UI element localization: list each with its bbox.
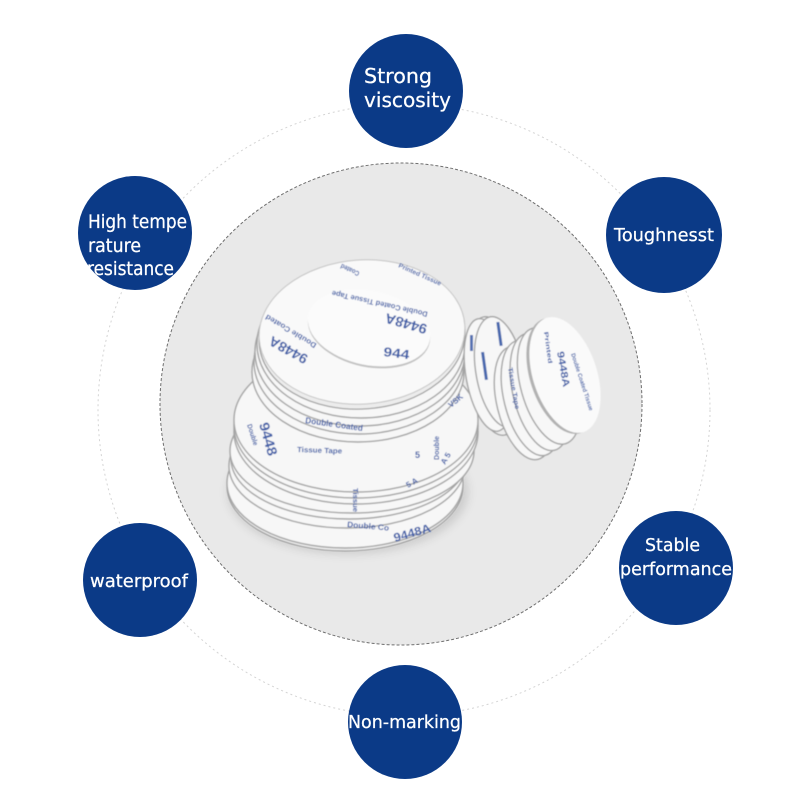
badge: Stable performance: performance: [620, 559, 732, 580]
large disc stack: Double: [245, 423, 259, 447]
badge: waterproof: [83, 523, 197, 637]
large disc stack: 944: [383, 344, 411, 362]
badge: Non-marking: [348, 665, 462, 779]
large disc stack: Coated: [340, 262, 361, 277]
central grey circle panel: [160, 163, 642, 645]
large disc stack: Double Coated: [263, 312, 318, 350]
large disc stack: Double Co: [347, 520, 390, 533]
small disc stacks: Printed: [542, 331, 552, 364]
badge: waterproof: waterproof: [90, 571, 189, 592]
large disc stack: Double: [434, 436, 441, 460]
printed labels on discs: 9448A: [383, 310, 429, 337]
large disc stack: Double Coated: [305, 415, 364, 433]
badge: Strong viscosity: viscosity: [364, 88, 451, 112]
badge: High temperature resistance: resistance: [87, 258, 174, 280]
badge: Stable performance: [619, 511, 733, 625]
outer dotted orbit ring: [98, 104, 710, 716]
badge: Toughnesst: [606, 177, 722, 293]
large disc stack: Tissue Tape: [297, 445, 342, 456]
product photo: stacks of adhesive discs: [227, 253, 614, 554]
small disc on top: [301, 281, 437, 379]
large disc stack: Printed Tissue: [397, 262, 442, 288]
badge: Non-marking: Non-marking: [348, 712, 461, 733]
large disc stack: 9448: [256, 420, 281, 458]
small disc stacks: [456, 308, 614, 466]
small disc stacks: Tissue Tape: [506, 367, 520, 410]
large disc stack: 5 A: [404, 476, 420, 490]
top disc: [254, 253, 470, 411]
badge: High temperature resistance: High tempe: [88, 211, 187, 233]
small disc stacks: 9448A: [554, 351, 571, 388]
badge: Toughnesst: Toughnesst: [613, 225, 714, 246]
large disc stack: VSK: [447, 392, 465, 410]
large disc stack: 5: [415, 450, 420, 460]
large disc stack: Double Coated Tissue Tape: [331, 289, 428, 319]
large disc stack: 9448A: [392, 521, 433, 545]
large disc stack: [227, 253, 478, 554]
large disc stack: Tissue: [351, 488, 358, 512]
badge: High temperature resistance: [78, 176, 192, 290]
small disc stacks: Double Coated Tissue: [569, 353, 594, 412]
badge: Strong viscosity: Strong: [364, 64, 432, 88]
badge: High temperature resistance: rature: [88, 235, 141, 257]
badge: Stable performance: Stable: [645, 535, 700, 556]
large disc stack: A 5: [439, 450, 453, 466]
large disc stack: 9448A: [266, 333, 310, 367]
badge: Strong viscosity: [349, 34, 463, 148]
